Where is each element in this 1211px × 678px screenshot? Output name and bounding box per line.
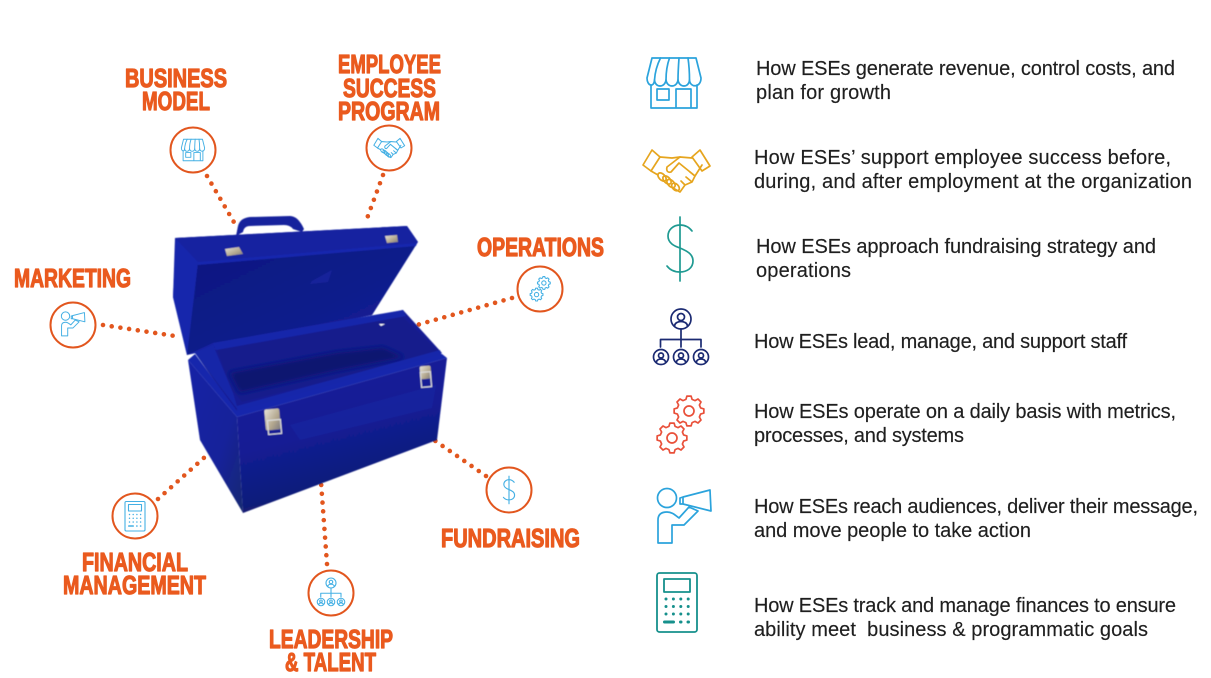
description: leadership: How ESEs lead, manage, and support staff: [754, 331, 1127, 353]
description: financial management: ability meet business & programmatic goals: [754, 619, 1148, 641]
dotted connector: operations: [417, 298, 512, 325]
dotted connector: business model: [207, 176, 235, 224]
description: marketing: [754, 496, 1198, 542]
legend row: leadership: [654, 309, 1127, 364]
icon: calculator: [657, 573, 697, 632]
latch: lid left: [225, 247, 243, 256]
description: marketing: How ESEs reach audiences, deliver their message,: [754, 496, 1198, 518]
description: employee success: [754, 147, 1192, 193]
heading: employee success program: [338, 49, 441, 126]
description: business model: plan for growth: [756, 82, 891, 104]
heading: operations: OPERATIONS: [477, 232, 604, 262]
toolbox front face: [237, 358, 447, 513]
legend row: financial management: [657, 573, 1176, 641]
dotted connector: fundraising: [434, 440, 486, 476]
circle icon: calculator: [112, 494, 158, 538]
description: employee success: during, and after employment at the organization: [754, 171, 1192, 193]
toolbox illustration: [173, 216, 447, 513]
toolbox interior: [195, 310, 442, 415]
description: operations: [754, 401, 1176, 447]
heading: business model: [125, 63, 227, 116]
heading: business model: MODEL: [142, 86, 210, 116]
legend row: business model: [647, 58, 1175, 108]
circle icon: megaphone person: [50, 302, 96, 348]
description: fundraising: [756, 236, 1156, 282]
legend row: fundraising: [667, 217, 1156, 282]
heading: leadership and talent: & TALENT: [285, 647, 376, 677]
heading: employee success program: SUCCESS: [343, 73, 436, 103]
heading: marketing: MARKETING: [14, 263, 131, 293]
description: business model: [756, 58, 1175, 104]
latch: front left: [264, 408, 282, 434]
dotted connector: leadership and talent: [321, 482, 327, 564]
dotted connector: marketing: [103, 325, 175, 336]
icon: megaphone person: [658, 488, 711, 543]
heading: leadership and talent: [269, 624, 393, 677]
description: fundraising: operations: [756, 260, 851, 282]
description: employee success: How ESEs’ support employee success before,: [754, 147, 1171, 169]
circle icon: store: [170, 128, 216, 172]
icon: org chart: [654, 309, 708, 364]
node: operations: [477, 232, 604, 312]
circle icon: dollar: [486, 468, 532, 512]
description: marketing: and move people to take action: [754, 520, 1031, 542]
heading: leadership and talent: LEADERSHIP: [269, 624, 393, 654]
node: employee success program: [338, 49, 441, 170]
node: financial management: [63, 494, 206, 600]
toolbox handle: [236, 216, 304, 236]
icon: dollar: [667, 217, 693, 281]
icon: handshake: [643, 150, 710, 192]
icon: store: [647, 58, 701, 108]
heading: employee success program: EMPLOYEE: [338, 49, 441, 79]
circle icon: handshake: [366, 126, 412, 170]
description: operations: processes, and systems: [754, 425, 964, 447]
node: leadership and talent: [269, 570, 393, 677]
circle icon: org chart: [308, 570, 354, 616]
heading: fundraising: FUNDRAISING: [441, 523, 580, 553]
legend row: employee success: [643, 147, 1192, 193]
latch: lid right: [385, 235, 398, 243]
legend row: marketing: [658, 488, 1198, 543]
description: financial management: How ESEs track and manage finances to ensure: [754, 595, 1176, 617]
heading: financial management: FINANCIAL: [82, 547, 188, 577]
description: business model: How ESEs generate revenue, control costs, and: [756, 58, 1175, 80]
circle icon: gears: [518, 266, 562, 312]
icon: gears: [657, 396, 704, 453]
dotted connector: financial management: [158, 456, 206, 499]
dotted connector: employee success program: [365, 175, 383, 224]
node: business model: [125, 63, 227, 172]
legend row: operations: [657, 396, 1176, 453]
heading: business model: BUSINESS: [125, 63, 227, 93]
heading: financial management: [63, 547, 206, 600]
node: fundraising: [441, 468, 580, 553]
toolbox lid: [173, 226, 418, 355]
description: financial management: [754, 595, 1176, 641]
description: fundraising: How ESEs approach fundraising strategy and: [756, 236, 1156, 258]
toolbox left face: [188, 360, 243, 513]
latch: front right: [419, 365, 432, 387]
node: marketing: [14, 263, 131, 348]
heading: financial management: MANAGEMENT: [63, 570, 206, 600]
heading: employee success program: PROGRAM: [338, 96, 440, 126]
description: operations: How ESEs operate on a daily basis with metrics,: [754, 401, 1176, 423]
